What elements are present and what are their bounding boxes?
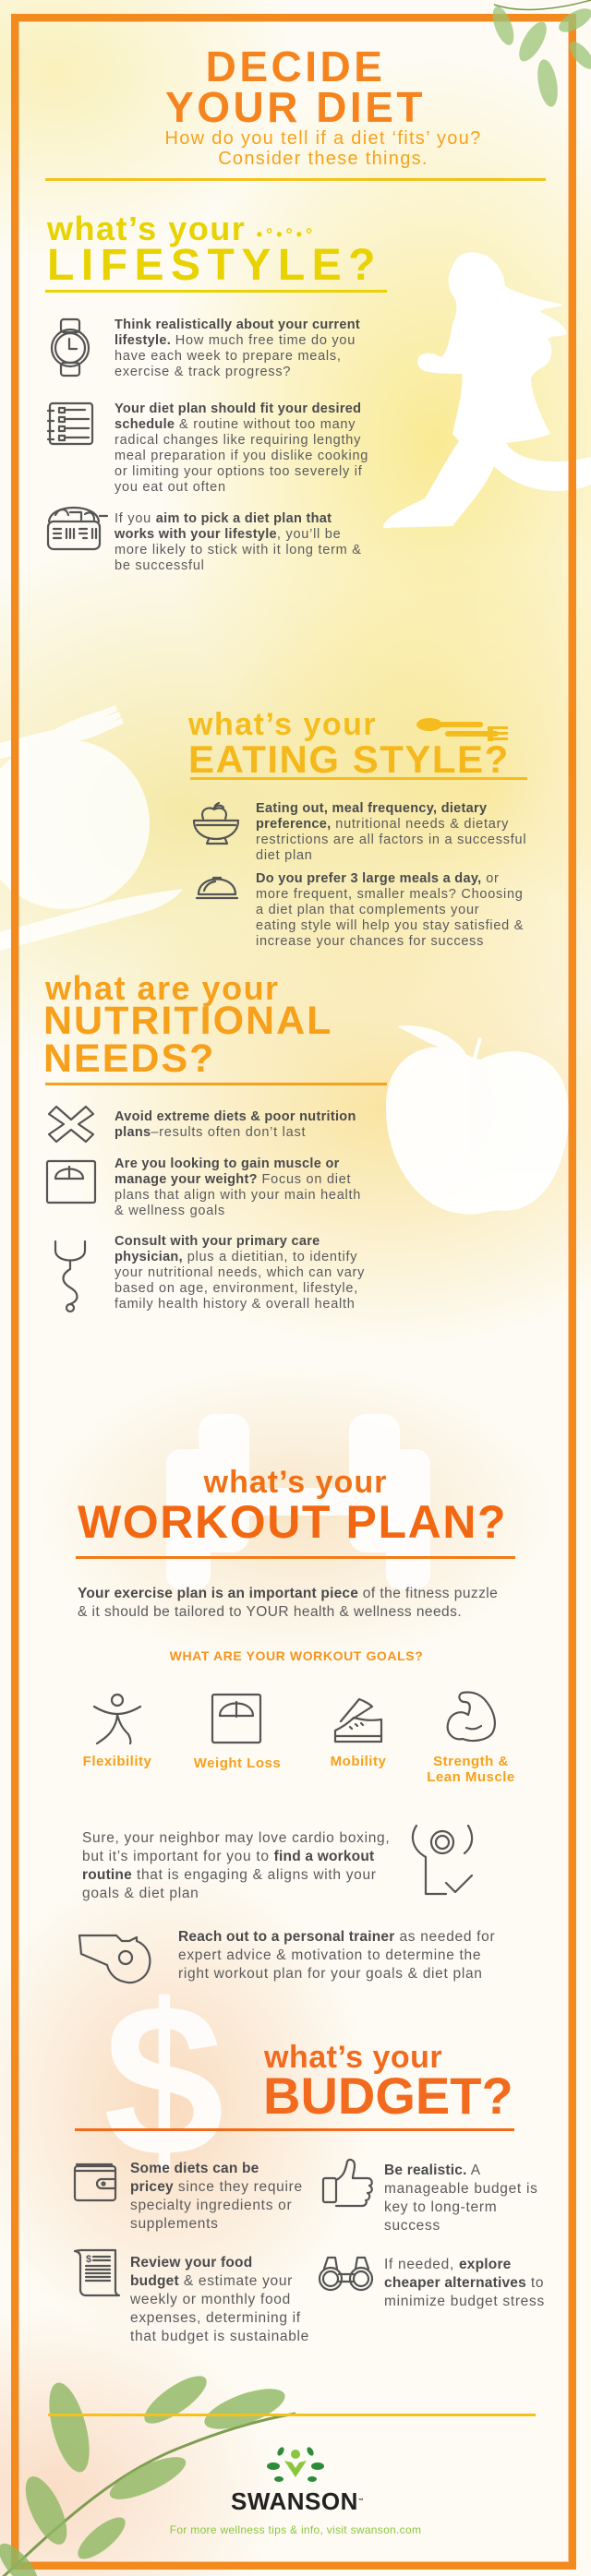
title: YOUR DIET xyxy=(165,83,426,131)
heading: budget: what’s your xyxy=(264,2040,442,2075)
text: pricey xyxy=(130,2161,303,2232)
text: review budget: that budget is sustainable xyxy=(130,2329,309,2344)
text: pricey: specialty ingredients or xyxy=(130,2198,292,2213)
section: nutritional needs: NEEDS? xyxy=(43,1036,215,1081)
leaves bottom left xyxy=(0,2363,314,2576)
text: find routine: routine that is engaging & aligns with your xyxy=(82,1867,377,1883)
text: lifestyle 3 xyxy=(115,511,362,573)
goal: strength xyxy=(427,1691,515,1785)
text: nutrition 1 xyxy=(115,1109,356,1140)
section: nutritional needs: NUTRITIONAL xyxy=(43,999,332,1043)
text: lifestyle 1: Think realistically about your current xyxy=(115,318,360,332)
text: review budget: expenses, determining if xyxy=(130,2310,301,2326)
icon: binoculars xyxy=(319,2254,374,2293)
text: personal trainer: expert advice & motivation to determine the xyxy=(178,1947,481,1963)
text: lifestyle 2: radical changes like requiring lengthy xyxy=(115,433,361,448)
text: eating 2: a diet plan that complements your xyxy=(256,903,479,917)
text: nutrition 1: Avoid extreme diets & poor nutrition xyxy=(115,1109,356,1124)
icon: receipt: $ xyxy=(86,2254,91,2265)
text: pricey: Some diets can be xyxy=(130,2161,259,2176)
text: personal trainer: Reach out to a personal trainer as needed for xyxy=(178,1929,495,1945)
text: realistic: Be realistic. A xyxy=(384,2163,481,2178)
text: lifestyle 2: Your diet plan should fit your desired xyxy=(115,401,361,416)
text: eating 1: Eating out, meal frequency, dietary xyxy=(256,801,487,816)
icon: basket xyxy=(46,506,109,550)
dollar: $ xyxy=(103,1959,224,2201)
heading: workout: what’s your xyxy=(204,1465,387,1500)
text: eating 2: more frequent, smaller meals? Choosing xyxy=(256,887,524,902)
icon: person check xyxy=(412,1824,473,1896)
section: lifestyle: LIFESTYLE? xyxy=(47,241,382,290)
section: eating style xyxy=(188,707,527,949)
icon: scale xyxy=(46,1159,96,1204)
text: lifestyle 1: lifestyle. How much free time do you xyxy=(115,333,356,348)
text: pricey: pricey since they require xyxy=(130,2179,303,2195)
logo: swanson xyxy=(231,2448,360,2514)
heading: nutritional: what are your xyxy=(45,969,280,1007)
icon: bowl xyxy=(192,801,240,845)
text: nutrition 3: Consult with your primary care xyxy=(115,1234,320,1249)
goal: weight loss xyxy=(194,1693,281,1771)
icon: thumbs up xyxy=(321,2158,373,2208)
text: review budget: Review your food xyxy=(130,2255,252,2270)
text: cheaper: cheaper alternatives to xyxy=(384,2275,544,2291)
text: lifestyle 2: you eat out often xyxy=(115,480,226,495)
leaves top right xyxy=(493,0,591,107)
text: lifestyle 3: If you aim to pick a diet plan that xyxy=(115,511,332,526)
text: workout intro xyxy=(78,1586,498,1620)
section: nutritional needs xyxy=(43,969,387,1312)
subtitle xyxy=(164,128,482,169)
text: nutrition 3: based on age, environment, lifestyle, xyxy=(115,1281,358,1296)
text: eating 2 xyxy=(256,871,524,949)
logo: swanson: SWANSON™ xyxy=(231,2487,364,2515)
dumbbell xyxy=(166,1414,430,1589)
subtitle: Consider these things. xyxy=(218,149,428,169)
text: nutrition 3: your nutritional needs, which can vary xyxy=(115,1265,365,1280)
text: nutrition 2: & wellness goals xyxy=(115,1204,225,1218)
text: nutrition 3 xyxy=(115,1234,365,1312)
icon: receipt xyxy=(73,2249,121,2297)
text: eating 1: restrictions are all factors in a successful xyxy=(256,833,526,847)
section: workout plan: WORKOUT PLAN? xyxy=(78,1496,507,1548)
text: nutrition 3: physician, plus a dietitian, to identify xyxy=(115,1250,357,1264)
heading: lifestyle: what’s your •°•°•° xyxy=(47,210,316,247)
subtitle: How do you tell if a diet ‘fits’ you? xyxy=(164,128,482,149)
text: eating 2: Do you prefer 3 large meals a day, or xyxy=(256,871,500,886)
text: lifestyle 1 xyxy=(115,318,360,379)
text: review budget xyxy=(130,2254,309,2346)
icon: stethoscope xyxy=(54,1240,87,1312)
text: lifestyle 1: exercise & track progress? xyxy=(115,365,291,379)
text: nutrition 2: manage your weight? Focus on diet xyxy=(115,1172,351,1187)
text: eating 2: eating style will help you stay satisfied & xyxy=(256,918,524,933)
text: eating 1: diet plan xyxy=(256,848,313,863)
apple xyxy=(386,1025,569,1215)
text: cheaper: minimize budget stress xyxy=(384,2294,545,2309)
text: eating 1 xyxy=(256,801,526,863)
text: pricey: supplements xyxy=(130,2216,219,2232)
goal: strength: Lean Muscle xyxy=(427,1769,515,1785)
goal: mobility xyxy=(331,1698,386,1769)
text: nutrition 2: plans that align with your main health xyxy=(115,1188,361,1203)
text: nutrition 2: Are you looking to gain muscle or xyxy=(115,1156,340,1171)
text: find routine: but it’s important for you to find a workout xyxy=(82,1849,374,1864)
text: lifestyle 3: more likely to stick with it long term & xyxy=(115,543,362,557)
icon: spoon fork xyxy=(416,718,508,741)
text: lifestyle 3: works with your lifestyle, you’ll be xyxy=(115,527,341,542)
title xyxy=(165,42,426,131)
text: realistic xyxy=(384,2163,538,2234)
subheading: goals: WHAT ARE YOUR WORKOUT GOALS? xyxy=(170,1648,423,1663)
runner xyxy=(383,252,591,528)
section: eating style: EATING STYLE? xyxy=(188,737,510,781)
icon: watch xyxy=(50,318,90,377)
icon: whistle xyxy=(78,1935,151,1984)
text: realistic: manageable budget is xyxy=(384,2181,538,2197)
text: lifestyle 1: have each week to prepare meals, xyxy=(115,349,342,364)
icon: wallet xyxy=(74,2163,116,2202)
text: eating 1: preference, nutritional needs & dietary xyxy=(256,817,509,832)
section: workout plan xyxy=(76,1465,515,1984)
text: lifestyle 2: meal preparation if you dislike cooking xyxy=(115,449,368,463)
text: review budget: weekly or monthly food xyxy=(130,2292,291,2307)
text: realistic: key to long-term xyxy=(384,2199,497,2215)
goals row xyxy=(83,1691,515,1785)
text: review budget: budget & estimate your xyxy=(130,2273,293,2289)
text: cheaper xyxy=(384,2256,545,2311)
section: lifestyle xyxy=(45,210,387,573)
text: find routine: goals & diet plan xyxy=(82,1886,199,1901)
goal: mobility: Mobility xyxy=(331,1754,386,1769)
text: eating 2: increase your chances for success xyxy=(256,934,484,949)
icon: x xyxy=(48,1106,94,1143)
text: workout intro: Your exercise plan is an important piece of the fitness puzzle xyxy=(78,1586,498,1601)
footer text: For more wellness tips & info, visit swanson.com xyxy=(170,2523,421,2536)
goal: weight loss: Weight Loss xyxy=(194,1755,281,1771)
text: lifestyle 2: or limiting your options too severely if xyxy=(115,464,363,479)
title: DECIDE xyxy=(206,42,385,90)
icon: cloche xyxy=(196,877,238,899)
heading: eating style: what’s your xyxy=(188,707,377,742)
text: realistic: success xyxy=(384,2218,440,2234)
goal: strength: Strength & xyxy=(433,1754,509,1769)
section: budget: BUDGET? xyxy=(263,2067,513,2125)
text: lifestyle 2 xyxy=(115,401,368,495)
text: nutrition 2 xyxy=(115,1156,361,1218)
text: cheaper: If needed, explore xyxy=(384,2257,512,2272)
section: budget xyxy=(74,2040,545,2344)
text: find routine: Sure, your neighbor may love cardio boxing, xyxy=(82,1830,390,1846)
text: personal trainer xyxy=(178,1929,495,1982)
text: nutrition 3: family health history & overall health xyxy=(115,1297,356,1312)
text: lifestyle 2: schedule & routine without too many xyxy=(115,417,356,432)
fork plate knife xyxy=(0,705,183,951)
text: lifestyle 3: be successful xyxy=(115,558,205,573)
text: personal trainer: right workout plan for your goals & diet plan xyxy=(178,1966,483,1982)
goal: flexibility xyxy=(83,1693,151,1769)
text: workout intro: & it should be tailored to YOUR health & wellness needs. xyxy=(78,1604,462,1620)
icon: list xyxy=(46,402,94,445)
text: find routine xyxy=(82,1830,390,1901)
text: nutrition 1: plans–results often don’t last xyxy=(115,1125,306,1140)
goal: flexibility: Flexibility xyxy=(83,1754,151,1769)
